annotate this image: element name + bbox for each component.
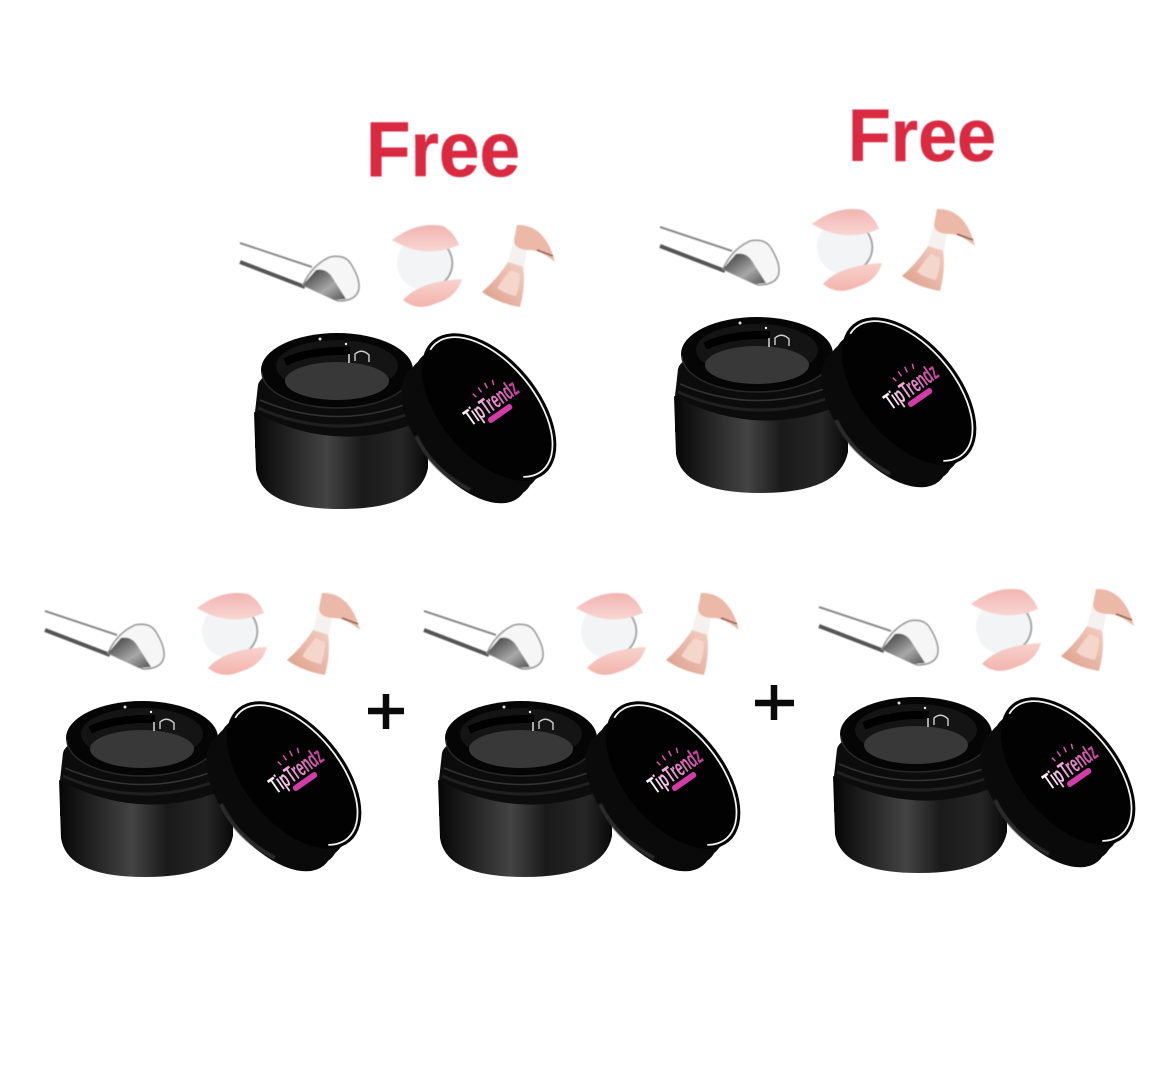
logo: TipTrendz [264, 743, 329, 799]
icon: tweezer [240, 243, 359, 301]
heading: Free right: Free [848, 94, 996, 177]
icon: lips with lens [392, 225, 462, 307]
icon: lips with lens [971, 589, 1041, 671]
jar [438, 701, 612, 877]
lid [377, 309, 582, 526]
icon: lips with lens [576, 593, 646, 675]
lid [182, 677, 387, 894]
jar [254, 333, 428, 509]
icon: tweezer [45, 611, 164, 669]
product set: bottom left [45, 593, 387, 894]
icon: nail [287, 593, 360, 675]
icon: lips with lens [197, 593, 267, 675]
icon: nail [482, 225, 555, 307]
logo: TipTrendz [879, 359, 944, 415]
logo [455, 369, 526, 434]
icon: nail [1061, 589, 1134, 671]
jar [59, 701, 233, 877]
lid [956, 673, 1161, 890]
logo [260, 737, 331, 802]
icon: tweezer [660, 227, 779, 285]
product set: bottom right [819, 589, 1161, 890]
product set: bottom middle [424, 593, 766, 894]
lid [561, 677, 766, 894]
icon: nail [902, 209, 975, 291]
logo [639, 737, 710, 802]
product set: top left [240, 225, 582, 526]
icon: nail [666, 593, 739, 675]
icon: lips with lens [812, 209, 882, 291]
icon: tweezer [424, 611, 543, 669]
plus sign right [755, 685, 794, 720]
logo: TipTrendz [459, 375, 524, 431]
logo [1034, 733, 1105, 798]
logo [875, 353, 946, 418]
product set: top right [660, 209, 1002, 510]
jar [833, 697, 1007, 873]
logo: TipTrendz [1038, 739, 1103, 795]
jar [674, 317, 848, 493]
lid [797, 293, 1002, 510]
plus sign left [368, 694, 404, 729]
heading: Free left: Free [366, 105, 520, 193]
icon: tweezer [819, 607, 938, 665]
logo: TipTrendz [643, 743, 708, 799]
